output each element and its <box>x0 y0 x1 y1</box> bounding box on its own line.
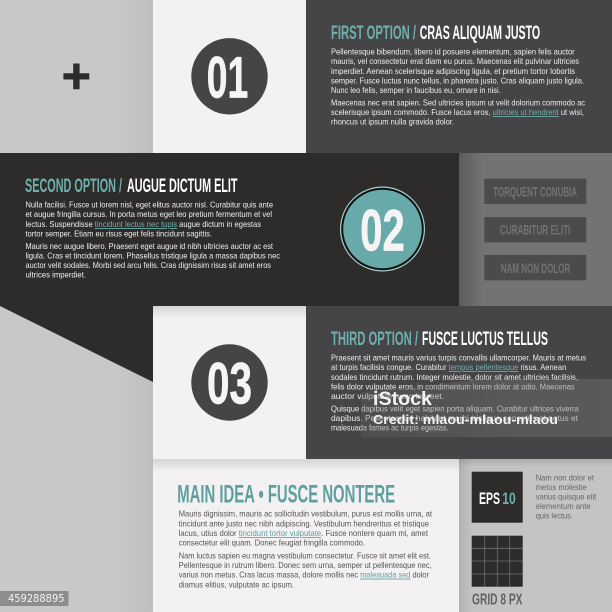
text block: main idea body: tincidunt ante justo nec nibh adipiscing. Vestibulum hendreritus et tristique <box>179 518 429 528</box>
text block: first option body: semper. Fusce luctus nunc tellus, in pharetra justo. Cras aliquam justo ligula. <box>331 76 584 86</box>
badge: 01 <box>191 38 268 114</box>
panel: main idea <box>153 459 459 612</box>
heading: second option: SECOND OPTION / <box>25 175 122 197</box>
button: curabitur eliti <box>484 217 586 242</box>
text block: second option body: Nulla facilisi. Fusce ut lorem nisl, eget elitus auctor nisl. Curabitur quis ante <box>26 200 273 210</box>
heading: third option: THIRD OPTION / <box>331 328 418 350</box>
badge: 02: 02 <box>360 199 405 264</box>
panel: diagonal split <box>0 306 153 459</box>
text block: specs note: varius quisque elit <box>536 492 597 502</box>
text block: second option body: Mauris nec augue libero. Praesent eget augue id nibh ultricies auctor ac est <box>26 241 274 251</box>
text block: third option body: malesuada fames ac turpis egestas. <box>331 422 449 432</box>
text block: third option body: auctor vulputate nunc laoreet. <box>331 391 444 401</box>
image id tag: 459288895 <box>8 593 64 605</box>
text block: main idea body: lacus, utius dolor tincidunt tortor vulputate. Fusce nontere quam mi, amet <box>179 528 429 538</box>
watermark text <box>373 388 558 427</box>
badge: 03: 03 <box>207 352 252 417</box>
heading: third option <box>331 328 548 350</box>
text block: third option body <box>331 352 586 432</box>
text block: second option body: ligula. Cras et tincidunt lorem. Phasellus tristique ligula a massa dapibus nec <box>26 250 281 260</box>
text block: main idea body: Nam luctus sapien eu magna vestibulum consectetur. Fusce sit amet elit est. <box>179 550 431 560</box>
heading: main idea: MAIN IDEA • FUSCE NONTERE <box>177 481 395 508</box>
text block: second option body: lectus. Suspendisse tincidunt lectus nec tupis augue dictum in egestas <box>26 219 261 229</box>
text block: main idea body: Pellentesque in rutrum libero. Donec sem urna, semper ut pellentesque nec, <box>179 560 432 570</box>
label: grid 8 px: GRID 8 PX <box>472 592 523 609</box>
text block: second option body: ultrices imperdiet. <box>26 270 86 280</box>
badge: 03 <box>191 344 268 421</box>
panel: second option <box>0 153 459 306</box>
panel: buttons <box>459 153 612 306</box>
text block: first option body: Nunc leo felis, semper in faucibus eu, ornare in nisi. <box>331 85 501 95</box>
button: nam non dolor <box>484 255 586 280</box>
text block: second option body <box>26 200 281 280</box>
text block: third option body: Quisque dapibus velit eget sapien porta aliquam. Curabitur ultrices viverra <box>331 404 579 414</box>
badge: EPS 10: 10 <box>502 489 516 508</box>
text block: first option body: Pellentesque bibendum, libero id posuere elementum, sapien felis auctor <box>331 46 575 56</box>
text block: first option body: imperdiet. Aenean scelerisque adipiscing ligula, et pretium tortor lobortis <box>331 66 575 76</box>
watermark text: Credit: mlaou-mlaou-mlaou <box>373 412 558 427</box>
text block: specs note: Nam non dolor et <box>536 472 595 482</box>
heading: second option: AUGUE DICTUM ELIT <box>127 175 238 197</box>
text block: third option body: dapibus. Pellentesque habitant morbi tristique senectus et netus et <box>331 413 579 423</box>
icon: grid <box>472 536 523 587</box>
text block: first option body: rhoncus ut ipsum nulla gravida dolor. <box>331 116 454 126</box>
badge: 02 <box>341 187 424 271</box>
text block: main idea body: diamus elitius, vulputate ac ipsum. <box>179 579 294 589</box>
text block: specs note: quis lectus. <box>536 510 573 520</box>
text block: third option body: felis dolor vulputate eros, in condimentum lorem dolor at odio. Maecenas <box>331 382 575 392</box>
text block: main idea body: varius non metus. Cras lacus massa, dolore mollis nec malesuada sed dolor <box>179 570 429 580</box>
watermark band <box>361 379 612 437</box>
text block: first option body: Maecenas nec erat sapien. Sed ultricies ipsum ut velit dolorium commodo ac <box>331 98 586 108</box>
heading: first option: FIRST OPTION / <box>331 22 416 44</box>
panel: number 01 <box>153 0 306 153</box>
text block: first option body <box>331 46 586 126</box>
icon: plus <box>63 64 89 89</box>
text block: specs note <box>536 472 597 520</box>
badge: EPS 10: EPS <box>479 489 500 508</box>
text block: first option body: scelerisque ipsum commodo. Fusce lacus eros, ultricies ut hendrerit ut wisi, <box>331 107 584 117</box>
text block: third option body: sodales tincidunt rutrum. Integer molestie, dolor sit amet ultricies facilisis, <box>331 372 578 382</box>
panel: number 03 <box>153 306 306 459</box>
text block: second option body: tortor semper. Etiam eu risus eget felis tincidunt sagittis. <box>26 228 212 238</box>
panel: third option <box>306 306 612 459</box>
text block: second option body: auctor velit sodales. Morbi sed arcu felis. Cras dignissim risus sit amet eros <box>26 260 271 270</box>
text block: main idea body: consectetur elit quam. Donec feugiat fringilla commodo. <box>179 538 365 548</box>
text block: specs note: elementum ante <box>536 501 591 511</box>
panel: first option <box>306 0 612 153</box>
watermark text: iStock <box>373 388 432 410</box>
button: torquent conubia <box>484 179 586 204</box>
text block: main idea body: Mauris dignissim, mauris ac sollicitudin vestibulum, purus est mollis urna, at <box>179 509 433 519</box>
text block: third option body: at turpis facilisis congue. Curabitur tempus pellentesque risus. Aenean <box>331 362 567 372</box>
text block: third option body: Praesent sit amet mauris varius turpis convallis ullamcorper. Mauris at metus <box>331 352 586 362</box>
text block: first option body: mauris, vel consectetur erat diam eu purus. Maecenas elit pulvinar ultricies <box>331 56 579 66</box>
badge: 01: 01 <box>207 46 248 110</box>
text block: second option body: et augue fringilla cursus. In porta metus eget leo pretium fermentum et vel <box>26 209 272 219</box>
panel: specs <box>459 459 612 612</box>
panel: bottom left grey <box>0 459 153 612</box>
badge: EPS 10 <box>472 472 523 523</box>
text block: main idea body <box>179 509 433 589</box>
text block: specs note: metus molestie <box>536 482 587 492</box>
panel: top left grey with plus <box>0 0 153 153</box>
